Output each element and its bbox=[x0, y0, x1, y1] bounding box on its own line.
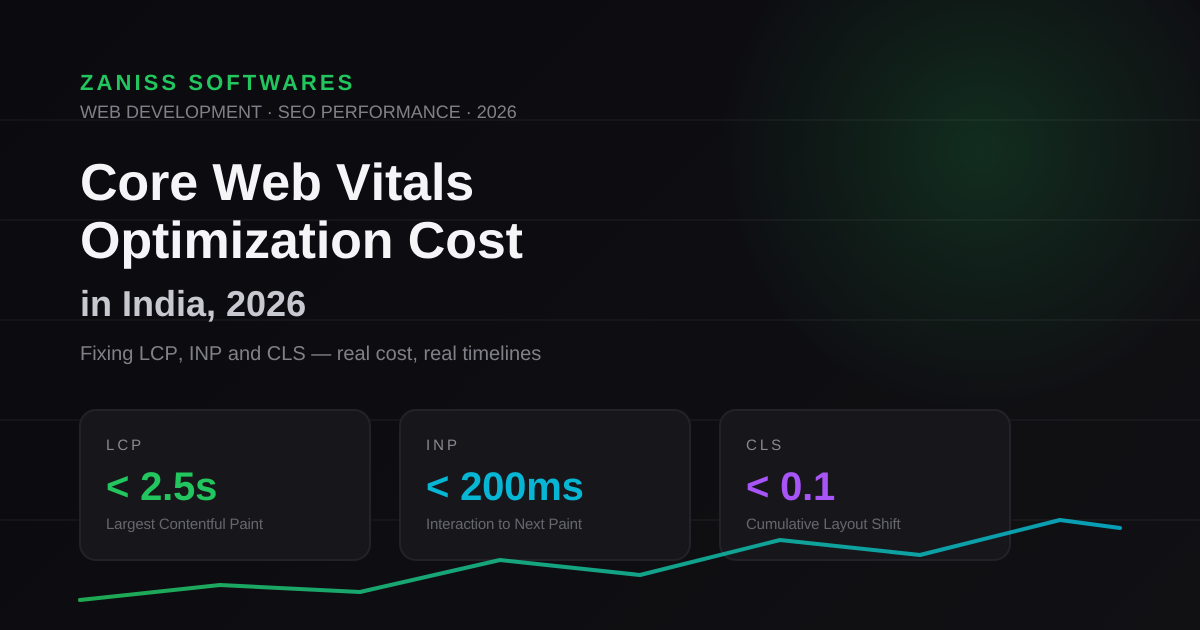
panel: LCP card bbox=[79, 409, 371, 561]
CLS description: Cumulative Layout Shift bbox=[746, 516, 901, 533]
CLS value: < 0.1 bbox=[746, 465, 835, 509]
category subtitle: WEB DEVELOPMENT · SEO PERFORMANCE · 2026 bbox=[80, 102, 517, 122]
title suffix: in India, 2026 bbox=[80, 283, 306, 324]
title: Core Web Vitals bbox=[80, 154, 474, 212]
INP description: Interaction to Next Paint bbox=[426, 516, 582, 533]
LCP label: LCP bbox=[106, 437, 144, 454]
INP label: INP bbox=[426, 437, 460, 454]
INP value: < 200ms bbox=[426, 465, 584, 509]
title: Optimization Cost bbox=[80, 212, 523, 270]
panel: INP card bbox=[399, 409, 691, 561]
panel: CLS card bbox=[719, 409, 1011, 561]
CLS label: CLS bbox=[746, 437, 784, 454]
LCP value: < 2.5s bbox=[106, 465, 217, 509]
brand name: ZANISS SOFTWARES bbox=[80, 70, 355, 95]
title bbox=[80, 154, 523, 270]
LCP description: Largest Contentful Paint bbox=[106, 516, 263, 533]
tagline: Fixing LCP, INP and CLS — real cost, real timelines bbox=[80, 343, 541, 365]
